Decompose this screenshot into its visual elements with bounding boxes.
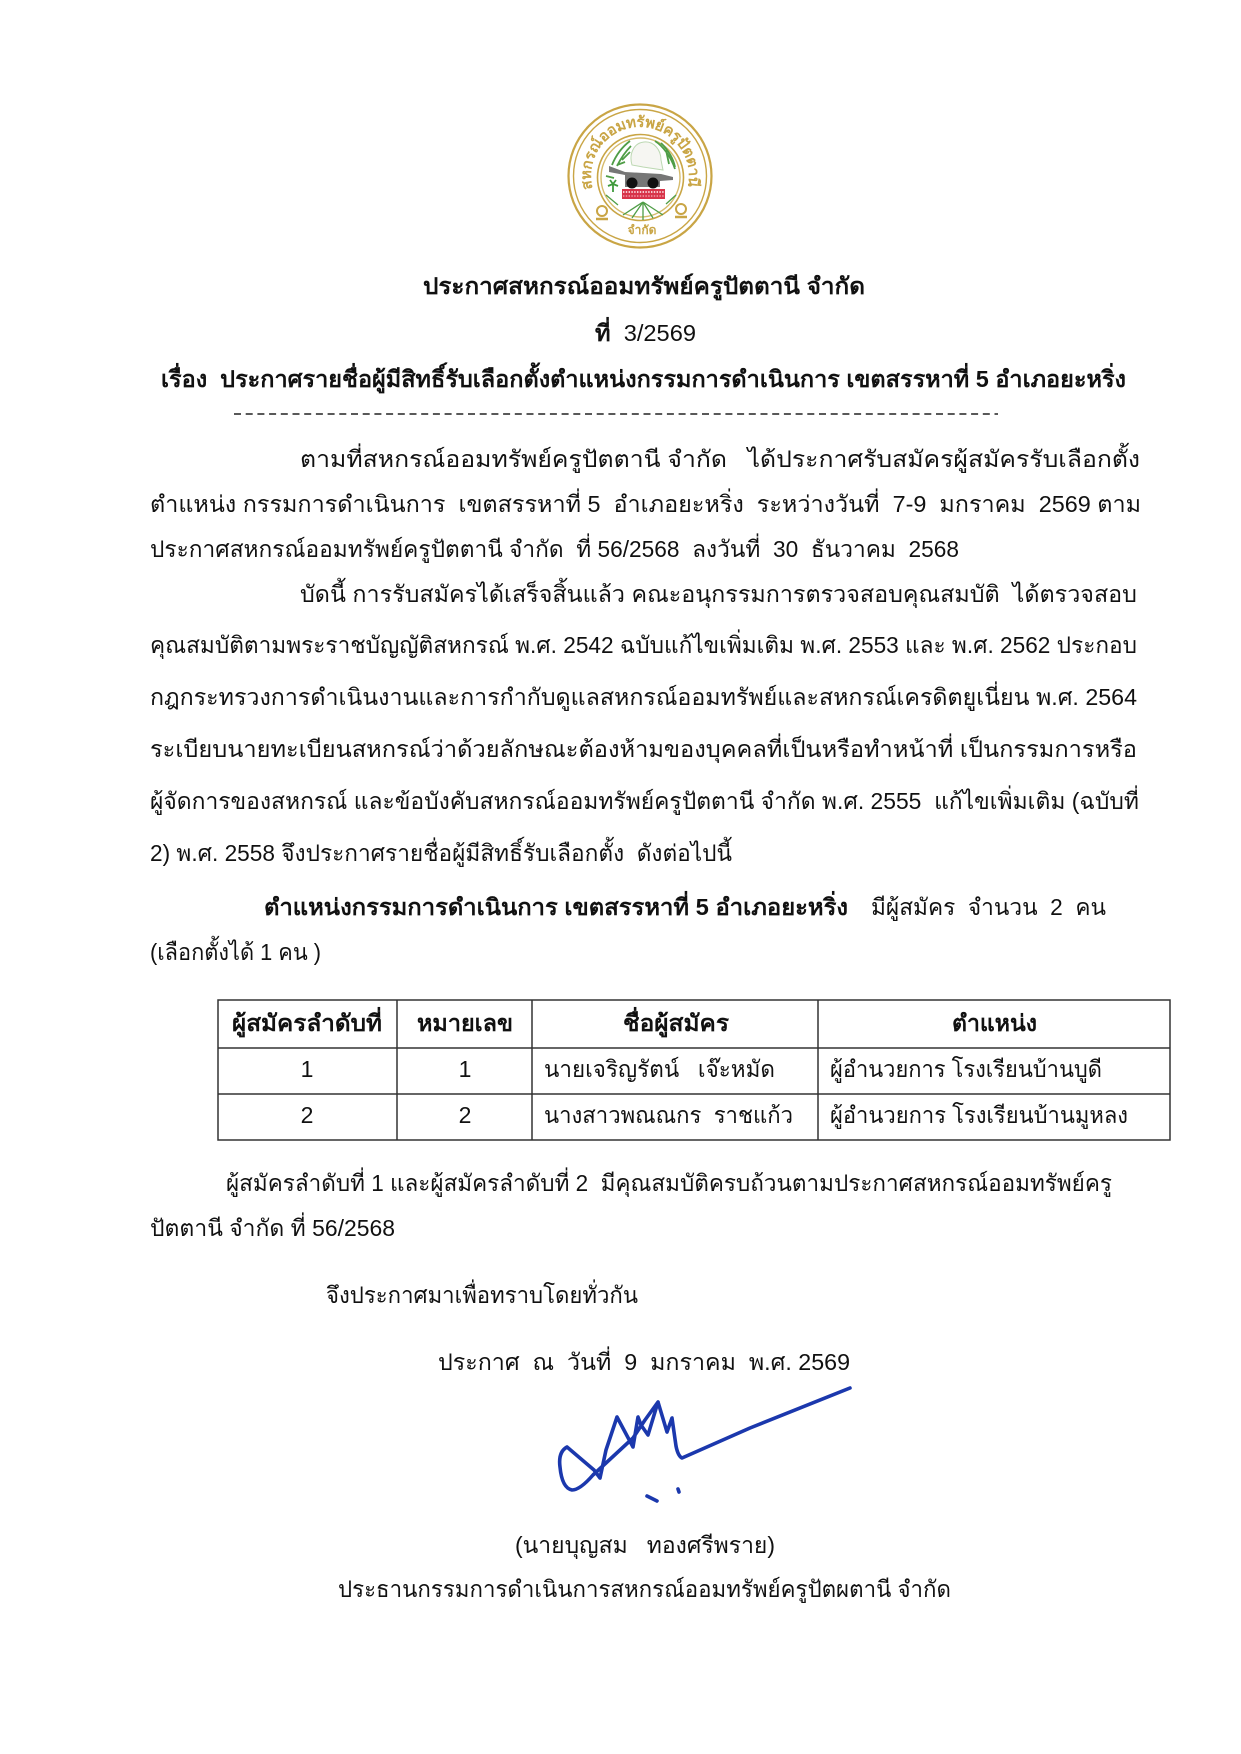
paragraph: application period bbox=[150, 443, 1141, 563]
date line: ประกาศ ณ วันที่ 9 มกราคม พ.ศ. 2569 bbox=[438, 1346, 850, 1375]
candidates table bbox=[218, 1000, 1170, 1140]
table row 1: 1 bbox=[301, 1056, 313, 1082]
table header row: ชื่อผู้สมัคร bbox=[623, 1006, 730, 1038]
table row 2: ผู้อำนวยการ โรงเรียนบ้านมูหลง bbox=[830, 1102, 1128, 1129]
paragraph: application period: ตามที่สหกรณ์ออมทรัพย์ครูปัตตานี จำกัด ได้ประกาศรับสมัครผู้สมัครรับเลือกตั้ง bbox=[300, 443, 1140, 473]
table header row: ตำแหน่ง bbox=[952, 1010, 1037, 1036]
table row 2: 2 bbox=[459, 1102, 471, 1128]
paragraph: qualification review: คุณสมบัติตามพระราชบัญญัติสหกรณ์ พ.ศ. 2542 ฉบับแก้ไขเพิ่มเติม พ.ศ. 2553 และ พ.ศ. 2562 ประกอบ bbox=[150, 629, 1137, 659]
table row 2: 2 bbox=[301, 1102, 313, 1128]
paragraph: qualification review: ระเบียบนายทะเบียนสหกรณ์ว่าด้วยลักษณะต้องห้ามของบุคคลที่เป็นหรือทำหน้าที่ เป็นกรรมการหรือ bbox=[150, 733, 1137, 763]
subject heading: เรื่อง ประกาศรายชื่อผู้มีสิทธิ์รับเลือกตั้งตำแหน่งกรรมการดำเนินการ เขตสรรหาที่ 5 อำเภอยะหริ่ง bbox=[161, 362, 1126, 394]
position heading with applicant count: ตำแหน่งกรรมการดำเนินการ เขตสรรหาที่ 5 อำเภอยะหริ่ง bbox=[264, 890, 848, 920]
position heading with applicant count: มีผู้สมัคร จำนวน 2 คน bbox=[871, 894, 1106, 921]
paragraph: qualification review: ผู้จัดการของสหกรณ์ และข้อบังคับสหกรณ์ออมทรัพย์ครูปัตตานี จำกัด พ.ศ. 2555 แก้ไขเพิ่มเติม (ฉบับที่ bbox=[150, 785, 1139, 815]
paragraph: qualifications confirmed: ปัตตานี จำกัด ที่ 56/2568 bbox=[150, 1212, 395, 1241]
position heading with applicant count bbox=[150, 890, 1106, 965]
table header row: หมายเลข bbox=[417, 1010, 513, 1036]
paragraph: qualification review: กฎกระทรวงการดำเนินงานและการกำกับดูแลสหกรณ์ออมทรัพย์และสหกรณ์เครดิตยูเนี่ยน พ.ศ. 2564 bbox=[150, 681, 1137, 711]
paragraph: application period: ตำแหน่ง กรรมการดำเนินการ เขตสรรหาที่ 5 อำเภอยะหริ่ง ระหว่างวันที่ 7-9 มกราคม 2569 ตาม bbox=[150, 488, 1141, 517]
table row 1: ผู้อำนวยการ โรงเรียนบ้านบูดี bbox=[830, 1056, 1102, 1083]
paragraph: application period: ประกาศสหกรณ์ออมทรัพย์ครูปัตตานี จำกัด ที่ 56/2568 ลงวันที่ 30 ธันวาคม 2568 bbox=[150, 533, 959, 563]
table row 1 bbox=[301, 1056, 1102, 1083]
announcement number: ที่ 3/2569 bbox=[595, 316, 696, 346]
logo: cooperative seal bbox=[567, 103, 713, 249]
signatory name: (นายบุญสม ทองศรีพราย) bbox=[515, 1532, 775, 1559]
position heading with applicant count: (เลือกตั้งได้ 1 คน ) bbox=[150, 936, 321, 965]
table row 1: 1 bbox=[459, 1056, 471, 1082]
title: ประกาศสหกรณ์ออมทรัพย์ครูปัตตานี จำกัด bbox=[423, 273, 865, 301]
paragraph: qualifications confirmed bbox=[150, 1167, 1112, 1241]
logo: cooperative seal: จำกัด bbox=[628, 223, 657, 237]
closing statement: จึงประกาศมาเพื่อทราบโดยทั่วกัน bbox=[326, 1279, 638, 1308]
paragraph: qualification review: 2) พ.ศ. 2558 จึงประกาศรายชื่อผู้มีสิทธิ์รับเลือกตั้ง ดังต่อไปนี้ bbox=[150, 836, 732, 867]
table row 1: นายเจริญรัตน์ เจ๊ะหมัด bbox=[544, 1056, 775, 1082]
table header row bbox=[232, 1006, 1037, 1038]
dashed separator bbox=[234, 413, 998, 415]
paragraph: qualifications confirmed: ผู้สมัครลำดับที่ 1 และผู้สมัครลำดับที่ 2 มีคุณสมบัติครบถ้วนตามประกาศสหกรณ์ออมทรัพย์ครู bbox=[226, 1167, 1112, 1197]
logo: cooperative seal: สหกรณ์ออมทรัพย์ครูปัตตานี bbox=[582, 114, 702, 190]
table row 2 bbox=[301, 1102, 1128, 1129]
paragraph: qualification review bbox=[150, 578, 1139, 867]
table row 2: นางสาวพณณกร ราชแก้ว bbox=[544, 1102, 793, 1128]
paragraph: qualification review: บัดนี้ การรับสมัครได้เสร็จสิ้นแล้ว คณะอนุกรรมการตรวจสอบคุณสมบัติ ได้ตรวจสอบ bbox=[300, 578, 1137, 608]
signatory title: ประธานกรรมการดำเนินการสหกรณ์ออมทรัพย์ครูปัตผตานี จำกัด bbox=[338, 1576, 951, 1603]
table header row: ผู้สมัครลำดับที่ bbox=[232, 1006, 382, 1038]
signature bbox=[560, 1388, 850, 1501]
